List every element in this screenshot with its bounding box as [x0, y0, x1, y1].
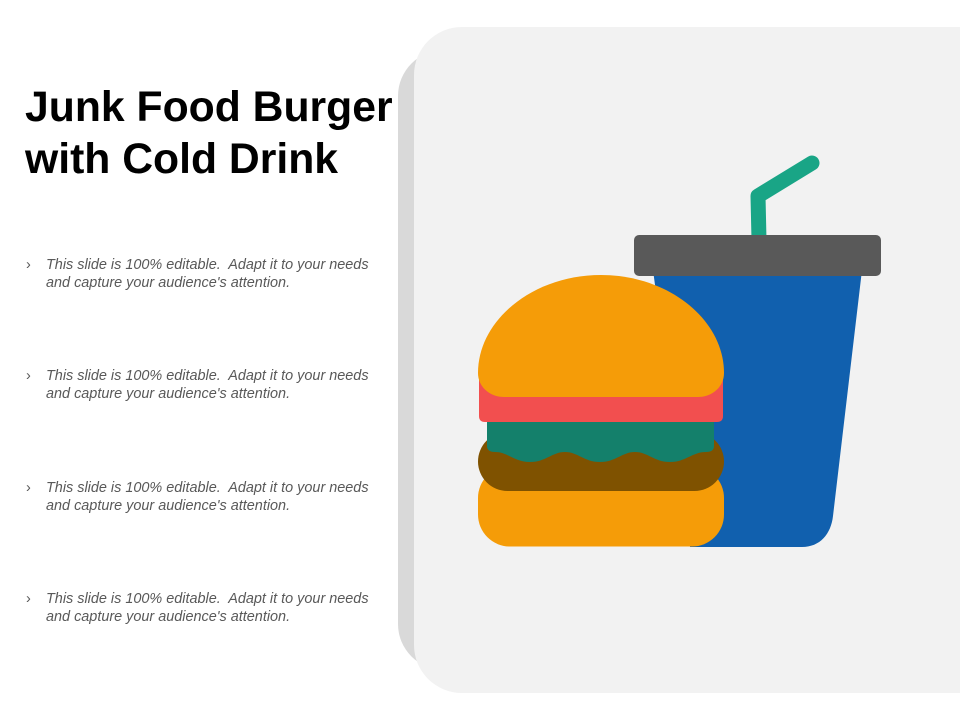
text block 4: and capture your audience's attention.: [46, 609, 290, 625]
text block 4: This slide is 100% editable. Adapt it to your needs: [46, 591, 369, 607]
icon: burger: [478, 275, 724, 546]
text block 4: [26, 591, 369, 625]
text block 4: ›: [26, 591, 31, 607]
lettuce: [487, 415, 714, 462]
panel: light background: [414, 27, 960, 693]
top bun: [478, 275, 724, 397]
title: with Cold Drink: [25, 135, 338, 183]
text block 3: This slide is 100% editable. Adapt it to your needs: [46, 480, 369, 496]
cup lid: [634, 235, 881, 276]
text block 1: ›: [26, 257, 31, 273]
bottom bun: [478, 466, 724, 546]
icon: drink cup with straw: [634, 163, 881, 547]
title: Junk Food Burger: [25, 83, 393, 131]
text block 2: [26, 368, 369, 402]
text block 3: ›: [26, 480, 31, 496]
cup body: [653, 270, 862, 547]
text block 1: This slide is 100% editable. Adapt it to your needs: [46, 257, 369, 273]
text block 1: and capture your audience's attention.: [46, 275, 290, 291]
patty: [478, 432, 724, 491]
text block 2: ›: [26, 368, 31, 384]
text block 2: This slide is 100% editable. Adapt it to your needs: [46, 368, 369, 384]
text block 3: and capture your audience's attention.: [46, 498, 290, 514]
title: [24, 83, 393, 183]
tomato: [479, 375, 723, 422]
text block 2: and capture your audience's attention.: [46, 386, 290, 402]
text block 1: [26, 257, 369, 291]
text block 3: [26, 480, 369, 514]
panel: grey shadow: [398, 50, 598, 670]
straw: [758, 163, 812, 240]
